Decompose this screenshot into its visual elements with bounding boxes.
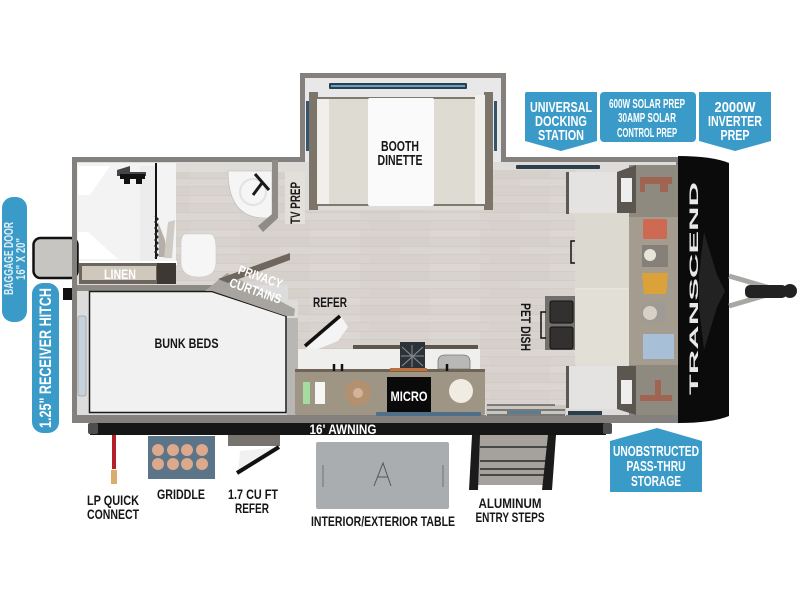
badge: inverter prep: 2000W [714,99,756,116]
privacy curtains: CURTAINS [227,275,284,307]
pet dish: PET DISH [518,303,533,351]
awning [88,421,612,437]
panel: bunk beds: BUNK BEDS [154,335,218,351]
faucet [253,174,269,195]
icon: hitch receiver [63,288,72,300]
baggage door [34,235,78,281]
badge: solar prep: 30AMP SOLAR [618,111,676,125]
panel: galley kitchen [287,295,485,415]
drawer handle [571,241,575,263]
microwave [387,377,431,412]
badge: pass-thru storage: PASS-THRU [626,459,686,475]
interior/exterior table: INTERIOR/EXTERIOR TABLE [311,513,455,529]
badge: receiver hitch [32,283,59,433]
interior floor [77,78,676,415]
badge: inverter prep: PREP [720,127,750,144]
storage shelf [629,165,679,415]
badge: pass-thru storage: STORAGE [631,474,681,490]
badge: pass-thru storage [610,428,702,492]
bath wall [258,160,278,232]
badge: solar prep: 600W SOLAR PREP [609,97,685,111]
badge: solar prep [600,92,696,142]
overhead cabinets [295,369,485,415]
griddle: GRIDDLE [157,486,205,502]
badge: inverter prep: INVERTER [708,113,762,130]
panel: booth dinette [305,78,501,210]
shower fixture [117,166,146,184]
toilet [181,234,216,277]
badge: universal docking station: STATION [538,127,584,144]
refrigerator door [305,316,348,349]
badge: solar prep: CONTROL PREP [617,126,677,140]
kitchen sink [438,355,470,369]
outer wall [72,73,680,423]
stove [400,342,425,368]
pet dish [518,296,575,351]
panel: linen: LINEN [104,266,136,282]
exterior refer [228,435,280,516]
interior/exterior table [311,442,455,529]
counter [353,345,478,349]
label: tv prep [285,172,305,224]
emblem [699,232,725,350]
badge: universal docking station [525,92,597,151]
faucets [334,364,447,371]
aluminum entry steps: ENTRY STEPS [476,509,544,525]
plank floor [176,170,576,405]
panel: front sofa and storage [566,165,679,415]
shower divider [155,163,157,259]
badge: universal docking station: UNIVERSAL [530,99,592,116]
LP quick connect [87,435,139,522]
badge: universal docking station: DOCKING [535,113,587,130]
badge: baggage door: 16" X 20" [13,238,28,280]
window: rear dinette [329,83,467,89]
awning: 16' AWNING [310,421,377,437]
aluminum entry steps [469,435,556,525]
panel: bathroom [77,160,278,285]
griddle [148,436,215,502]
exterior refer: REFER [235,500,269,516]
bunk mattress [90,292,286,412]
panel: linen [79,261,177,284]
sink [228,171,272,218]
orange range hood [390,368,427,371]
window: side left [306,101,309,151]
end tables [566,172,569,214]
trailer floorplan body [72,73,680,423]
cabinet lights [303,382,310,404]
badge: baggage door [1,197,28,322]
badge: receiver hitch: 1.25" RECEIVER HITCH [36,288,55,428]
label: tv prep: TV PREP [288,182,303,224]
privacy curtains [205,253,295,316]
shower [77,163,176,261]
sofa [575,213,629,289]
panel: galley kitchen: MICRO [390,388,428,404]
dinette table [368,98,434,206]
armrests [617,165,636,213]
label: booth dinette: BOOTH [381,139,419,155]
LP quick connect: CONNECT [87,506,139,522]
entry door and mat [376,405,602,416]
folding door [155,216,158,258]
window: front side [516,165,600,169]
bath floor [176,172,276,285]
label: refer: REFER [313,295,347,310]
bunk window [78,316,86,396]
LP quick connect: LP QUICK [87,492,139,508]
badge: baggage door: BAGGAGE DOOR [1,222,16,295]
badge: pass-thru storage: UNOBSTRUCTED [613,444,699,460]
window: side right [494,101,497,151]
panel: booth dinette: DINETTE [378,153,423,169]
towels [158,222,167,257]
panel: bunk beds [77,285,288,415]
trailer nose cap: TRANSCEND [687,181,701,395]
badge: inverter prep [699,92,771,151]
privacy curtains: PRIVACY [236,262,285,291]
exterior refer: 1.7 CU FT [228,486,278,502]
trailer nose cap [678,156,729,423]
tongue and hitch [729,276,797,306]
aluminum entry steps: ALUMINUM [478,495,542,511]
storage gear [640,177,674,401]
